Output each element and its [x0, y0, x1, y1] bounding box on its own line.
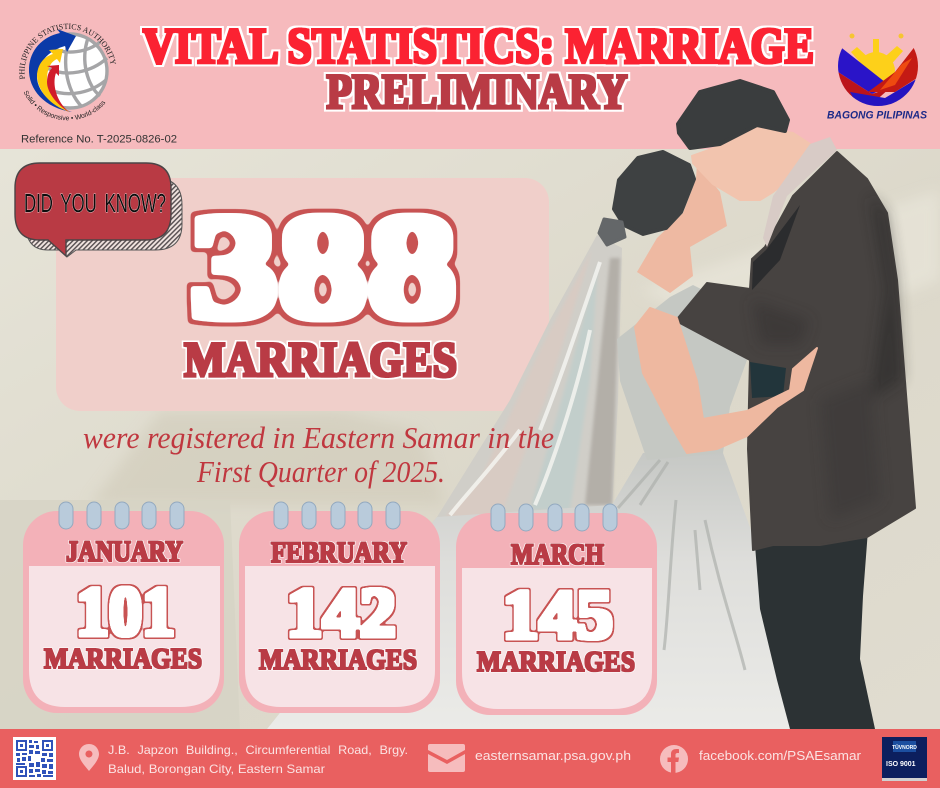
- icon: envelope: [428, 744, 465, 772]
- emblem red band: [838, 72, 886, 98]
- label: MARRIAGES: [259, 644, 417, 676]
- address line 2: Balud, Borongan City, Eastern Samar: [108, 762, 325, 776]
- rings: [59, 502, 184, 529]
- bubble text: DID YOU KNOW?: [24, 188, 166, 218]
- bride veil: [267, 235, 640, 729]
- header band: [0, 0, 940, 149]
- month: FEBRUARY: [271, 536, 407, 569]
- rings: [274, 502, 400, 529]
- yellow arrow: [37, 49, 70, 112]
- jacket cuff shadow: [750, 362, 786, 398]
- bride hair bun: [599, 219, 625, 245]
- label: MARRIAGES: [477, 646, 635, 678]
- skirt folds: [618, 460, 745, 670]
- logo ring text: PHILIPPINE STATISTICS AUTHORITY: [19, 24, 116, 80]
- man jacket: [678, 152, 915, 550]
- dress bodice: [617, 285, 747, 460]
- calendar: March: [456, 504, 657, 715]
- emblem orange band: [880, 58, 912, 90]
- bride hair: [614, 152, 694, 234]
- badge: ISO 9001: ISO 9001: [886, 761, 916, 768]
- jacket dark shading: [752, 195, 902, 520]
- bride neck and face: [637, 163, 727, 293]
- count: 142: [286, 575, 396, 652]
- bubble: [15, 163, 171, 256]
- QR code: [13, 737, 56, 780]
- calendar: January: [23, 502, 224, 713]
- badge: ISO 9001: [882, 737, 927, 781]
- count: 145: [502, 577, 613, 654]
- footer band: [0, 729, 940, 788]
- dress skirt: [267, 453, 790, 729]
- icon: facebook: [660, 745, 688, 773]
- man hair: [678, 81, 788, 148]
- logo motto text: Solid • Responsive • World-class: [24, 90, 106, 120]
- count: 101: [76, 574, 175, 651]
- description: [83, 420, 554, 489]
- reference number: Reference No. T-2025-0826-02: [21, 134, 177, 146]
- emblem: [838, 48, 918, 106]
- website: easternsamar.psa.gov.ph: [475, 748, 631, 763]
- icon: pin: [79, 744, 99, 771]
- main number: 388: [189, 185, 457, 349]
- veil colour folds: [445, 250, 620, 517]
- emblem right red band: [868, 48, 918, 92]
- hatch shadow: [26, 178, 182, 257]
- man face and neck: [692, 127, 810, 200]
- description line 1: were registered in Eastern Samar in the: [83, 420, 554, 455]
- emblem text: BAGONG PILIPINAS: [827, 110, 927, 122]
- man trousers: [755, 530, 875, 729]
- globe: [32, 33, 108, 109]
- description line 2: First Quarter of 2025.: [196, 454, 445, 489]
- red arrow: [47, 65, 69, 112]
- emblem lower blue band: [850, 79, 916, 106]
- logo: Bagong Pilipinas: [827, 34, 927, 122]
- month: JANUARY: [66, 535, 183, 568]
- facebook handle: facebook.com/PSAEsamar: [699, 748, 862, 763]
- badge: ISO 9001: TÜVNORD: [892, 744, 917, 751]
- illustration: couple: [267, 81, 915, 729]
- jacket lapel shadow: [752, 205, 800, 290]
- emblem blue band: [838, 48, 884, 94]
- address line 1: J.B. Japzon Building., Circumferential Road, Brgy.: [108, 743, 408, 757]
- veil highlight folds: [450, 262, 600, 515]
- sun rays: [851, 39, 903, 68]
- title: VITAL STATISTICS: MARRIAGE: [143, 19, 814, 75]
- bride arm and hand: [635, 308, 817, 453]
- month: MARCH: [511, 538, 604, 571]
- callout: did you know: [15, 163, 182, 257]
- background: [0, 149, 940, 729]
- rings: [491, 504, 617, 531]
- sun disc: [857, 52, 895, 90]
- logo: PSA: [19, 24, 116, 120]
- label: MARRIAGES: [44, 643, 202, 675]
- calendar: February: [239, 502, 440, 713]
- subtitle: PRELIMINARY: [326, 63, 628, 119]
- man collar: [763, 137, 837, 247]
- stars: [850, 34, 904, 38]
- blue arrow: [29, 29, 76, 112]
- main label: MARRIAGES: [184, 331, 457, 387]
- panel: highlight: [56, 178, 549, 411]
